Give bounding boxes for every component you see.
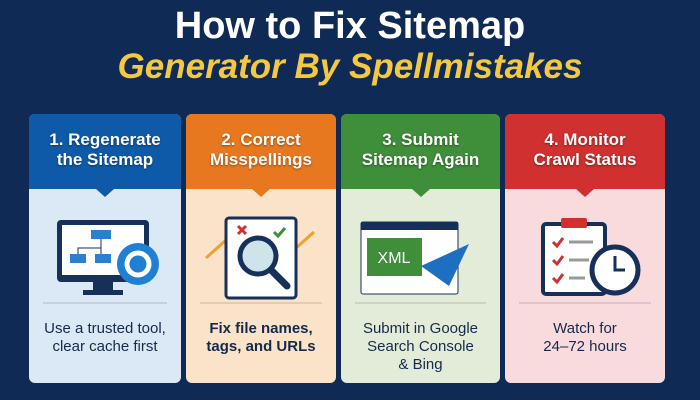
icon: clipboard clock — [541, 218, 640, 296]
header 2: 2. Correct — [221, 130, 301, 149]
header 1: 1. Regenerate — [49, 130, 161, 149]
text 3: Search Console — [367, 338, 474, 355]
header 1: the Sitemap — [57, 150, 153, 169]
panel: monitor — [505, 114, 665, 383]
header 3: 3. Submit — [382, 130, 459, 149]
header 3 — [341, 114, 500, 189]
text 4 — [543, 320, 627, 355]
text 1: Use a trusted tool, — [44, 320, 166, 337]
text 2 — [206, 320, 316, 355]
icon: monitor — [57, 220, 159, 295]
subtitle: Generator By Spellmistakes — [118, 47, 582, 86]
header 4: Crawl Status — [534, 150, 636, 169]
text 3: Submit in Google — [363, 320, 478, 337]
text 3 — [363, 320, 478, 373]
icon: xml paper plane — [360, 222, 469, 294]
header 1 — [29, 114, 181, 189]
text 4: 24–72 hours — [543, 338, 627, 355]
text 1 — [44, 320, 166, 355]
icon: xml paper plane: XML — [378, 250, 411, 267]
panel: submit — [341, 114, 500, 383]
text 2: tags, and URLs — [206, 338, 316, 355]
text 3: & Bing — [398, 356, 443, 373]
title: How to Fix Sitemap — [175, 5, 525, 47]
header 4: 4. Monitor — [544, 130, 626, 149]
text 4: Watch for — [553, 320, 617, 337]
header 3: Sitemap Again — [362, 150, 479, 169]
header 2 — [186, 114, 336, 189]
panel: regenerate — [29, 114, 181, 383]
icon: magnifier doc — [205, 216, 315, 300]
text 1: clear cache first — [52, 338, 158, 355]
header 2: Misspellings — [210, 150, 312, 169]
header 4 — [505, 114, 665, 189]
panel: correct — [186, 114, 336, 383]
text 2: Fix file names, — [209, 320, 313, 337]
